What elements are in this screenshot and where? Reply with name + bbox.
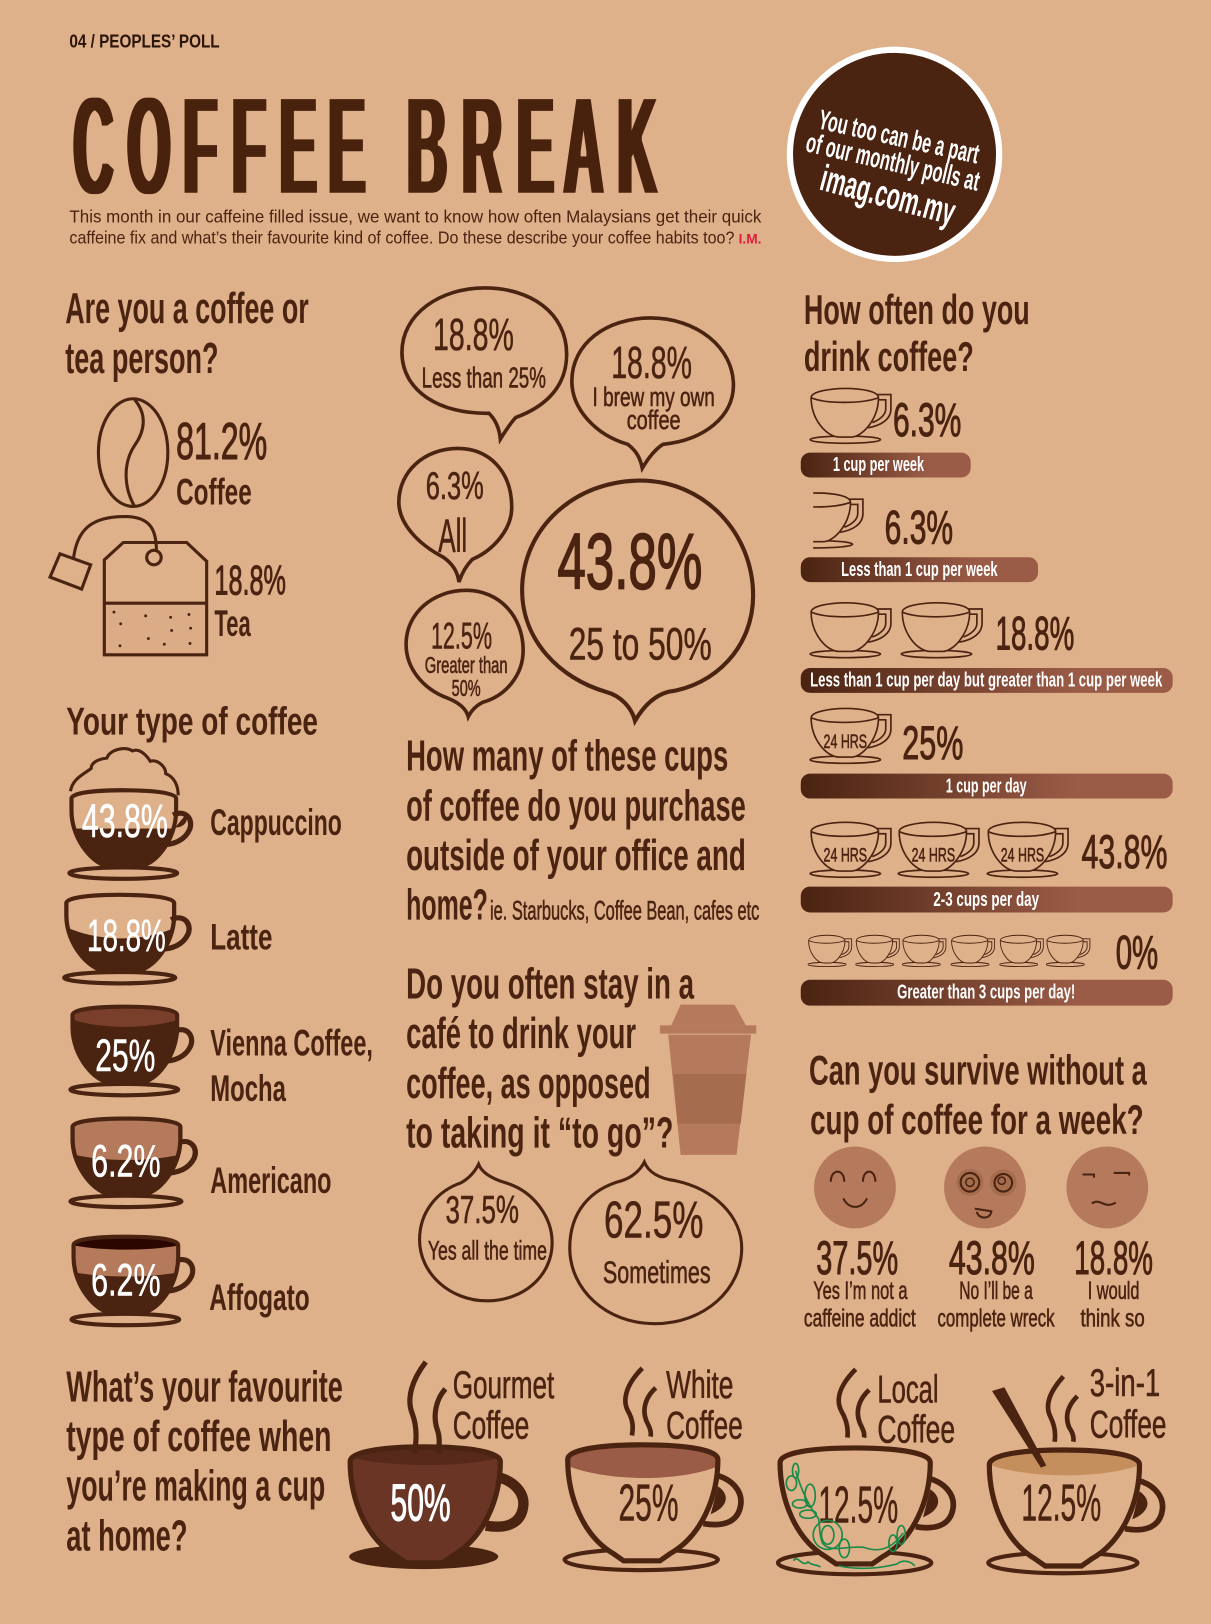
- heading: stay in a cafe: to taking it “to go”?: [406, 1110, 673, 1158]
- row: less than 1 cup per week: [782, 493, 1038, 582]
- label: vienna coffee, mocha: [210, 1021, 373, 1109]
- label: gourmet coffee: Gourmet: [453, 1363, 554, 1407]
- cup: vienna coffee: [70, 1005, 192, 1095]
- heading: favourite type at home: type of coffee when: [66, 1413, 331, 1461]
- stat: not an addict: caffeine addict: [804, 1306, 916, 1333]
- intro text: caffeine fix and what’s their favourite kind of coffee. Do these describe your coffee habits too?: [69, 227, 735, 247]
- bubble: all: All: [438, 510, 467, 563]
- heading: how often: [804, 286, 1030, 380]
- row: greater than 3 cups per day: Greater than 3 cups per day!: [897, 980, 1075, 1003]
- cup: gourmet coffee: 50%: [391, 1473, 451, 1531]
- bubble: less than 25%: [402, 288, 567, 439]
- coffee percentage: [176, 412, 267, 512]
- label: latte: Latte: [210, 916, 272, 958]
- label: americano: Americano: [210, 1159, 331, 1201]
- stat: not an addict: [804, 1232, 916, 1333]
- bubble: less than 25%: Less than 25%: [422, 362, 546, 394]
- intro text: [69, 207, 762, 247]
- heading: coffee or tea: Are you a coffee or: [65, 285, 309, 333]
- callout: monthly polls badge: imag.com.my: [816, 156, 960, 233]
- label: white coffee: [666, 1363, 743, 1448]
- heading: how many cups purchased outside: outside of your office and: [406, 832, 746, 880]
- label: white coffee: White: [666, 1363, 733, 1407]
- heading: how many cups purchased outside: How many of these cups: [406, 733, 728, 781]
- heading: how many cups purchased outside: of coffee do you purchase: [406, 782, 746, 830]
- stat: complete wreck: No I’ll be a: [959, 1278, 1033, 1305]
- intro text: I.M.: [739, 231, 761, 246]
- heading: favourite type at home: What’s your favourite: [66, 1363, 343, 1411]
- coffee percentage: 81.2%: [176, 412, 267, 470]
- row: 1 cup per day: 1 cup per day: [946, 774, 1027, 797]
- heading: favourite type at home: you’re making a cup: [66, 1463, 325, 1511]
- stat: I would think so: think so: [1080, 1306, 1145, 1333]
- heading: how often: drink coffee?: [804, 333, 974, 380]
- bubble: yes all the time: Yes all the time: [428, 1235, 547, 1265]
- callout: monthly polls badge: of our monthly polls at: [803, 127, 983, 197]
- row: 2-3 cups per day: 24 HRS: [912, 845, 955, 867]
- bubble: brew my own: [572, 318, 733, 468]
- bubble: sometimes: [570, 1162, 742, 1324]
- row: 1 cup per day: 24 HRS: [824, 731, 867, 753]
- label: gourmet coffee: [453, 1363, 554, 1448]
- label: vienna coffee, mocha: Vienna Coffee,: [210, 1021, 373, 1063]
- bubble: brew my own: 18.8%: [611, 337, 692, 388]
- row: less than 1 cup per week: 6.3%: [885, 502, 953, 555]
- cup: cappuccino: [69, 749, 191, 879]
- bubble: greater than 50%: Greater than: [425, 652, 508, 678]
- panel: coffee or tea: [50, 285, 309, 655]
- row: 1 cup per day: 25%: [902, 717, 963, 770]
- callout: monthly polls badge: [790, 50, 999, 259]
- heading: stay in a cafe: café to drink your: [406, 1010, 636, 1058]
- label: 3-in-1 coffee: 3-in-1: [1090, 1361, 1160, 1405]
- panel: survive without coffee: [804, 1046, 1153, 1333]
- heading: coffee or tea: [65, 285, 309, 383]
- icon: dizzy face: [944, 1147, 1026, 1228]
- row: less than 1 cup per week: Less than 1 cup per week: [841, 558, 998, 581]
- row: 2-3 cups per day: 24 HRS: [1001, 845, 1044, 867]
- row: 1 cup per week: [801, 388, 971, 477]
- label: vienna coffee, mocha: Mocha: [210, 1067, 286, 1109]
- stat: not an addict: Yes I’m not a: [813, 1278, 908, 1305]
- tea percentage: [214, 557, 286, 644]
- cup: 3-in-1 coffee: 12.5%: [1021, 1473, 1101, 1531]
- cup: local coffee: 12.5%: [818, 1476, 898, 1533]
- panel: favourite coffee at home: [66, 1361, 1166, 1574]
- stat: complete wreck: complete wreck: [938, 1306, 1055, 1333]
- heading: stay in a cafe: Do you often stay in a: [406, 960, 695, 1008]
- heading: favourite type at home: [66, 1363, 343, 1560]
- bubble: greater than 50%: 12.5%: [431, 614, 492, 656]
- cup: latte: [64, 895, 189, 983]
- bubble: sometimes: Sometimes: [603, 1255, 711, 1290]
- panel: how often do you drink coffee: [782, 286, 1173, 1006]
- row: 1 cup per week: 6.3%: [893, 394, 961, 447]
- bubble: yes all the time: [420, 1164, 552, 1301]
- heading: survive: [809, 1046, 1147, 1143]
- bubble: 25 to 50%: 43.8%: [557, 517, 702, 605]
- cup: white coffee: [565, 1368, 741, 1570]
- row: greater than 3 cups per day: 0%: [1116, 926, 1158, 979]
- label: cappuccino: Cappuccino: [210, 801, 342, 843]
- coffee percentage: Coffee: [176, 470, 252, 512]
- bubble: brew my own: I brew my own: [593, 382, 715, 412]
- heading: how many cups purchased outside: ie. Starbucks, Coffee Bean, cafes etc: [490, 896, 759, 926]
- cup: americano: 6.2%: [91, 1136, 161, 1187]
- icon: tea bag: [50, 517, 207, 655]
- bubble: all: 6.3%: [426, 464, 484, 508]
- section label: 04 / PEOPLES’ POLL: [69, 32, 220, 52]
- stat: I would think so: [1074, 1232, 1153, 1333]
- title: COFFEE BREAK: [74, 67, 657, 225]
- cup: affogato: [71, 1235, 193, 1325]
- cup: vienna coffee: 25%: [95, 1030, 155, 1081]
- row: 2-3 cups per day: 2-3 cups per day: [933, 888, 1039, 911]
- label: local coffee: Local: [877, 1367, 939, 1411]
- heading: how many cups purchased outside: [406, 733, 759, 930]
- icon: coffee bean: [98, 399, 168, 506]
- heading: how many cups purchased outside: home?: [406, 882, 488, 930]
- icon: happy face: [814, 1147, 896, 1228]
- bubble: all: [399, 448, 512, 582]
- row: 2-3 cups per day: [801, 822, 1173, 912]
- heading: how often: How often do you: [804, 286, 1030, 333]
- heading: favourite type at home: at home?: [66, 1512, 188, 1560]
- label: white coffee: Coffee: [666, 1404, 743, 1448]
- cup: 3-in-1 coffee: [988, 1376, 1163, 1573]
- stat: I would think so: I would: [1088, 1278, 1140, 1305]
- bubble: 25 to 50%: 25 to 50%: [569, 619, 712, 670]
- icon: takeaway cup: [660, 1005, 756, 1155]
- bubble: 25 to 50%: [522, 481, 753, 721]
- tea percentage: 18.8%: [214, 557, 286, 603]
- stat: complete wreck: [938, 1232, 1055, 1333]
- label: gourmet coffee: Coffee: [453, 1404, 529, 1448]
- panel: your type of coffee: [64, 699, 373, 1325]
- stat: complete wreck: 43.8%: [949, 1232, 1035, 1285]
- cup: gourmet coffee: [349, 1362, 523, 1569]
- bubble: sometimes: 62.5%: [604, 1191, 703, 1249]
- stat: not an addict: 37.5%: [816, 1232, 898, 1285]
- callout: monthly polls badge: You too can be a part: [816, 104, 982, 170]
- icon: unsure face: [1066, 1147, 1148, 1228]
- row: less than 1 cup per day: [801, 603, 1173, 693]
- row: less than 1 cup per day: 18.8%: [996, 607, 1074, 660]
- bubble: brew my own: coffee: [627, 405, 681, 435]
- bubble: yes all the time: 37.5%: [445, 1188, 519, 1232]
- row: 2-3 cups per day: 24 HRS: [824, 845, 867, 867]
- panel: outside purchase bubbles: [399, 288, 753, 721]
- label: affogato: Affogato: [209, 1276, 310, 1318]
- cup: cappuccino: 43.8%: [82, 795, 168, 848]
- cup: white coffee: 25%: [618, 1473, 679, 1531]
- label: local coffee: Coffee: [877, 1408, 955, 1452]
- bubble: less than 25%: 18.8%: [433, 309, 514, 360]
- row: 1 cup per day: [801, 708, 1173, 799]
- heading: coffee or tea: tea person?: [65, 335, 219, 383]
- cup: latte: 18.8%: [87, 910, 166, 961]
- row: greater than 3 cups per day: [801, 926, 1173, 1006]
- heading: stay in a cafe: [406, 960, 695, 1158]
- bubble: greater than 50%: [406, 590, 523, 717]
- cup: americano: [70, 1116, 195, 1207]
- heading: type of coffee: Your type of coffee: [66, 699, 318, 743]
- label: 3-in-1 coffee: Coffee: [1090, 1403, 1166, 1447]
- stat: I would think so: 18.8%: [1074, 1232, 1153, 1285]
- cup: local coffee: [778, 1369, 953, 1574]
- intro text: This month in our caffeine filled issue, we want to know how often Malaysians get their quick: [69, 207, 762, 227]
- label: local coffee: [877, 1367, 955, 1452]
- label: 3-in-1 coffee: [1090, 1361, 1166, 1447]
- tea percentage: Tea: [214, 602, 251, 644]
- cup: affogato: 6.2%: [91, 1255, 161, 1306]
- heading: stay in a cafe: coffee, as opposed: [406, 1060, 651, 1108]
- decoration: green floral: [786, 1463, 915, 1568]
- bubble: greater than 50%: 50%: [452, 675, 481, 701]
- row: 1 cup per week: 1 cup per week: [833, 453, 924, 476]
